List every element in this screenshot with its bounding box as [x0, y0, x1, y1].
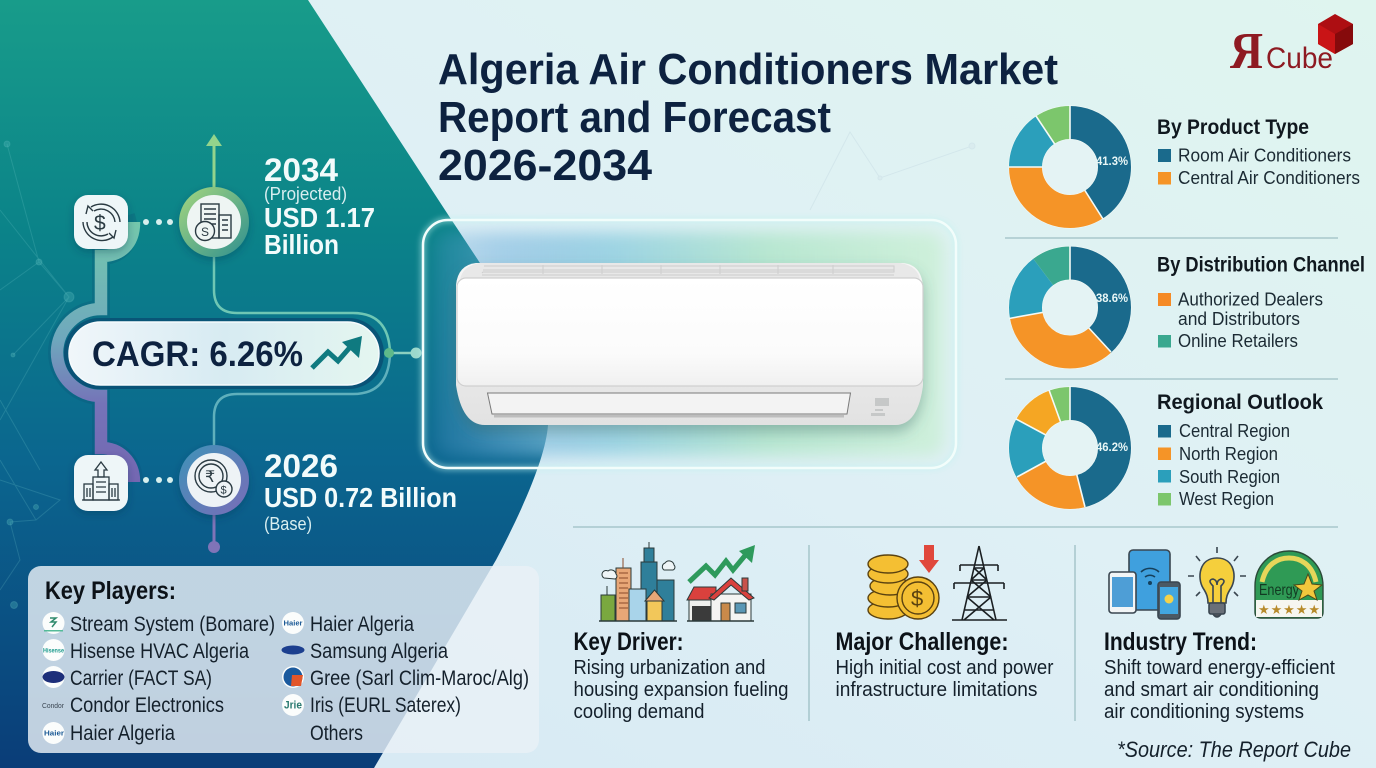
legend: by distribution channel: and Distributors — [1178, 308, 1300, 329]
donut chart: product type — [1008, 105, 1132, 228]
forecast value 2034: USD 1.17 — [264, 202, 375, 233]
icon circle: buildings and dollar — [179, 187, 249, 257]
base value 2026 — [264, 448, 457, 534]
forecast value 2034 — [264, 152, 375, 260]
dark diagonal background panel — [0, 0, 548, 768]
icon: energy rating badge — [1255, 551, 1323, 618]
donut chart: distribution channel: 38.6% — [1096, 293, 1128, 305]
thin connectors to the CAGR pill — [214, 146, 416, 545]
logo: Stream System — [42, 612, 64, 634]
donut chart: regional outlook: 46.2% — [1096, 442, 1128, 454]
network pattern on the dark panel — [0, 141, 74, 608]
legend: regional outlook: Regional Outlook — [1157, 391, 1323, 414]
heading and text: key driver: Key Driver: — [574, 628, 684, 656]
logo: Haier second column: Haier — [284, 618, 303, 628]
heading and text: major challenge — [836, 628, 1054, 701]
logo: Condor: Condor — [42, 703, 65, 710]
logo: Samsung — [282, 646, 304, 654]
legend: regional outlook: West Region — [1179, 488, 1274, 509]
legend: by product type — [1157, 116, 1360, 188]
source note: *Source: The Report Cube — [1117, 737, 1351, 762]
section dividers — [809, 545, 1075, 721]
icon: light bulb — [1188, 547, 1246, 617]
legend: by distribution channel: Authorized Dealers — [1178, 288, 1323, 310]
divider lines — [573, 238, 1338, 527]
icon circle: buildings and dollar: S — [201, 225, 209, 239]
logo: Haier second column — [282, 612, 304, 634]
heading and text: key driver — [574, 628, 788, 723]
intake grille — [482, 265, 894, 275]
logo: RCube: Я — [1230, 23, 1263, 80]
connector dots: bottom — [143, 477, 173, 483]
legend: by product type: Room Air Conditioners — [1178, 144, 1351, 166]
title: 2026-2034 — [438, 141, 653, 190]
icon: energy rating badge: Energy — [1259, 582, 1299, 599]
heading and text: major challenge: High initial cost and power — [836, 657, 1054, 679]
player names: Haier Algeria — [70, 722, 175, 745]
growth connector band — [57, 216, 134, 482]
forecast value 2034: Billion — [264, 229, 339, 260]
logo: Haier — [42, 722, 64, 744]
player names: Stream System (Bomare) — [70, 613, 275, 636]
icon: power transmission tower — [952, 546, 1007, 620]
CAGR pill — [64, 318, 384, 389]
player names: Iris (EURL Saterex) — [310, 694, 461, 717]
legend: regional outlook: South Region — [1179, 466, 1280, 487]
icon tile: building with up arrow — [74, 455, 128, 511]
icon: energy rating badge: ★★★★★ — [1258, 603, 1320, 618]
legend: regional outlook: North Region — [1179, 443, 1278, 464]
base value 2026: USD 0.72 Billion — [264, 482, 457, 513]
logo: RCube: Cube — [1266, 42, 1333, 75]
front panel — [457, 278, 923, 386]
player names: Gree (Sarl Clim-Maroc/Alg) — [310, 667, 529, 690]
faint network lines on the light area — [810, 132, 975, 210]
legend: by distribution channel: Online Retailers — [1178, 330, 1298, 351]
icon: city skyline — [599, 542, 677, 621]
forecast value 2034: (Projected) — [264, 184, 347, 204]
icon tile: dollar exchange — [74, 195, 128, 249]
icon: coin stack with down arrow: $ — [911, 586, 923, 611]
panel: key players — [28, 566, 539, 753]
title: Algeria Air Conditioners Market — [438, 45, 1058, 94]
base value 2026: (Base) — [264, 514, 312, 534]
donut chart: distribution channel — [1008, 246, 1132, 369]
connector dots: top — [143, 219, 173, 225]
legend: regional outlook: Central Region — [1179, 420, 1290, 441]
icon circle: rupee and dollar coins: ₹ — [205, 467, 215, 486]
forecast value 2034: 2034 — [264, 152, 338, 188]
base value 2026: 2026 — [264, 448, 338, 484]
legend: by product type: Central Air Conditioners — [1178, 167, 1360, 188]
air vent flap — [488, 393, 850, 414]
icon: rising arrow and house — [687, 545, 755, 621]
player names: Samsung Algeria — [310, 640, 448, 663]
player names — [70, 613, 529, 745]
icon tile: dollar exchange: $ — [94, 212, 106, 235]
player names: Condor Electronics — [70, 694, 224, 717]
legend: by distribution channel — [1157, 254, 1365, 351]
heading and text: major challenge: infrastructure limitations — [836, 679, 1038, 701]
arrow head: up to 2034 — [206, 134, 222, 146]
icon circle: rupee and dollar coins — [179, 445, 249, 515]
heading and text: industry trend: Industry Trend: — [1104, 628, 1257, 656]
heading: key players: Key Players: — [45, 577, 176, 605]
logo: Gree — [282, 666, 304, 688]
heading and text: industry trend: and smart air conditioning — [1104, 679, 1319, 701]
heading and text: industry trend: Shift toward energy-efficient — [1104, 657, 1335, 679]
title: Report and Forecast — [438, 93, 831, 142]
logo: RCube — [1230, 14, 1353, 80]
heading and text: industry trend — [1104, 628, 1335, 723]
heading and text: key driver: housing expansion fueling — [574, 679, 788, 701]
heading and text: industry trend: air conditioning systems — [1104, 701, 1304, 723]
player names: Hisense HVAC Algeria — [70, 640, 249, 663]
donut chart: product type: 41.3% — [1096, 156, 1128, 168]
air conditioner unit — [456, 263, 923, 425]
icon circle: rupee and dollar coins: $ — [220, 484, 227, 496]
logo: Haier: Haier — [44, 728, 64, 738]
indicator lights — [871, 398, 889, 416]
icon: rising trend arrow — [312, 336, 362, 368]
logo: Iris — [282, 694, 304, 716]
logo: Iris: Jrie — [284, 700, 302, 712]
glowing frame around air conditioner — [423, 220, 956, 468]
legend: regional outlook — [1157, 391, 1323, 509]
icon: smart devices — [1109, 550, 1180, 619]
connector end nodes — [208, 348, 422, 553]
logo: Carrier — [42, 666, 64, 688]
heading and text: key driver: cooling demand — [574, 701, 704, 723]
CAGR pill: CAGR: 6.26% — [92, 335, 303, 374]
legend: by product type: By Product Type — [1157, 116, 1309, 139]
logo: Hisense: Hisense — [43, 648, 64, 654]
heading and text: key driver: Rising urbanization and — [574, 657, 766, 679]
icon: coin stack with down arrow — [868, 545, 939, 619]
player names: Others — [310, 722, 363, 745]
donut chart: regional outlook — [1008, 386, 1132, 510]
title — [438, 45, 1058, 190]
heading and text: major challenge: Major Challenge: — [836, 628, 1008, 656]
player names: Carrier (FACT SA) — [70, 667, 212, 690]
logo: Hisense — [42, 639, 64, 661]
player names: Haier Algeria — [310, 613, 414, 636]
